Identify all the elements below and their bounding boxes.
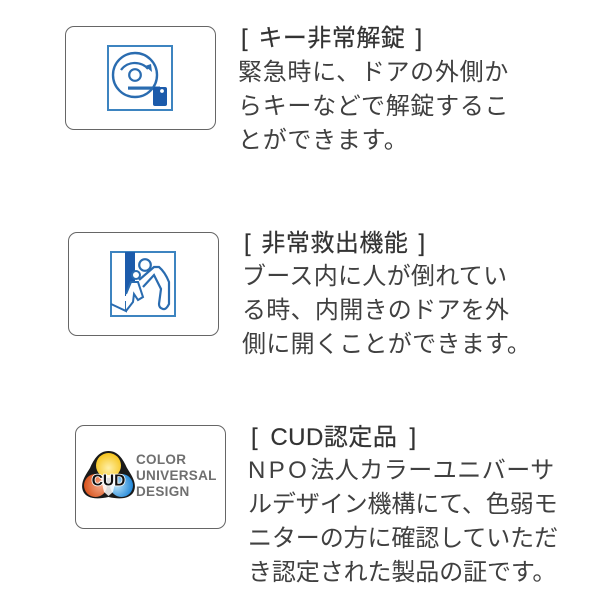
text block: key emergency unlock description: とができます。 bbox=[238, 127, 408, 154]
text block: CUD certification description bbox=[248, 456, 558, 586]
logo text: color universal design bbox=[136, 452, 217, 499]
text block: emergency rescue description: 側に開くことができます。 bbox=[242, 331, 531, 358]
logo text: color universal design: DESIGN bbox=[136, 484, 190, 499]
icon: color universal design logo bbox=[82, 451, 135, 498]
text block: CUD certification description: ルデザイン機構にて、色弱モ bbox=[248, 491, 558, 518]
logo text: color universal design: COLOR bbox=[136, 452, 186, 467]
heading: CUD certified product: [ CUD認定品 ] bbox=[251, 424, 417, 451]
text block: key emergency unlock description: 緊急時に、ドアの外側か bbox=[238, 59, 509, 86]
panel: key emergency unlock icon card bbox=[65, 26, 216, 130]
text block: emergency rescue description: ブース内に人が倒れてい bbox=[242, 263, 507, 290]
text block: CUD certification description: NPO法人カラーユニバーサ bbox=[248, 456, 555, 484]
panel: CUD logo card bbox=[75, 425, 226, 529]
panel: emergency rescue icon card bbox=[68, 232, 219, 336]
logo wordmark CUD: CUD bbox=[92, 472, 125, 490]
icon: emergency rescue figures bbox=[110, 251, 176, 317]
logo text: color universal design: UNIVERSAL bbox=[136, 468, 217, 483]
heading: key emergency unlock: [ キー非常解錠 ] bbox=[241, 24, 423, 52]
text block: CUD certification description: き認定された製品の証です。 bbox=[248, 559, 556, 586]
text block: key emergency unlock description bbox=[238, 59, 509, 154]
icon: emergency key unlock dial bbox=[107, 45, 173, 111]
text block: CUD certification description: ニターの方に確認していただ bbox=[248, 525, 558, 552]
text block: emergency rescue description: る時、内開きのドアを外 bbox=[242, 297, 509, 324]
text block: key emergency unlock description: らキーなどで解錠するこ bbox=[238, 93, 509, 120]
text block: emergency rescue description bbox=[242, 263, 531, 358]
heading: emergency rescue function: [ 非常救出機能 ] bbox=[244, 230, 426, 257]
